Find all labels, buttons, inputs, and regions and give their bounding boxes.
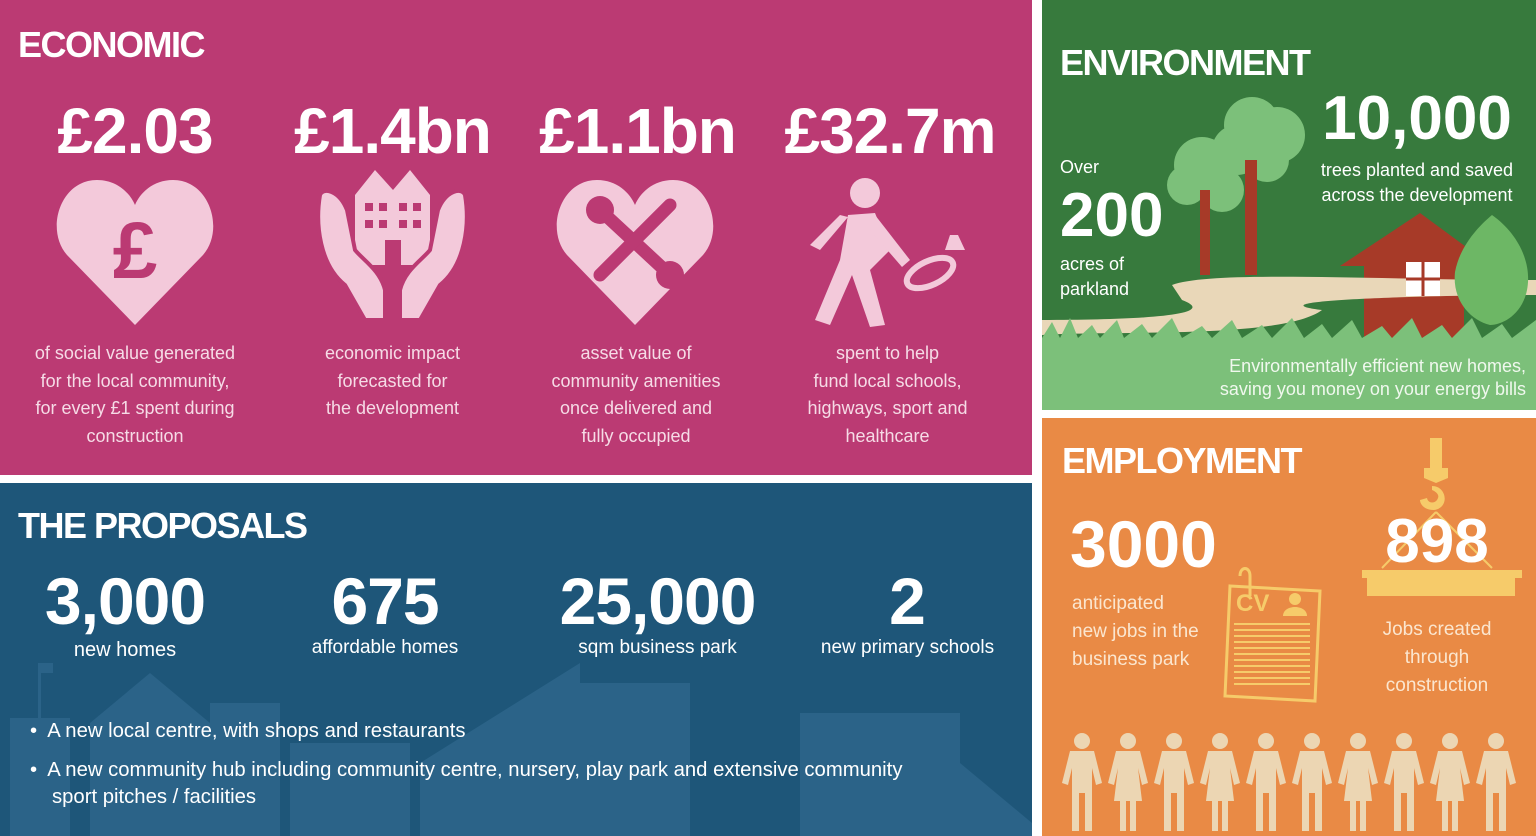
- text: social value: of social value generated: [35, 343, 235, 363]
- text: social value: for every £1 spent during: [35, 398, 235, 418]
- icon: heart with pound: [56, 180, 214, 325]
- stat: 675 affordable homes: [312, 564, 458, 658]
- text: social value: [35, 343, 235, 446]
- text: jobs through construction: Jobs created through construction: [1383, 619, 1491, 696]
- stat: over 200 acres: Over: [1060, 157, 1099, 177]
- text: efficient homes: saving you money on your energy bills: [1220, 379, 1526, 399]
- text: spent to help: [807, 343, 968, 446]
- illustration: park scene: [1042, 97, 1536, 410]
- text: efficient homes: [1220, 356, 1526, 399]
- stat: £1.1bn: £1.1bn: [539, 95, 736, 167]
- icon: hands with building: [320, 170, 465, 318]
- stat: £32.7m: £32.7m: [784, 95, 996, 167]
- text: spent to help: highways, sport and: [807, 398, 968, 418]
- text: economic impact: the development: [326, 398, 459, 418]
- stat: £2.03: £2.03: [57, 95, 213, 167]
- stat: 2 schools: [821, 564, 994, 658]
- stat: 2 schools: 2: [889, 564, 926, 638]
- bullet list: [30, 720, 902, 808]
- text: spent to help: spent to help: [836, 343, 939, 363]
- text: anticipated jobs: anticipated: [1072, 593, 1164, 614]
- panel: environment: [1042, 0, 1536, 410]
- stat: 675 affordable homes: 675: [331, 564, 439, 638]
- text: asset value: fully occupied: [581, 426, 691, 446]
- text: economic impact: [325, 343, 460, 418]
- icon: crane hook and beam: [1362, 438, 1522, 596]
- icon: heart with tools: [556, 180, 714, 325]
- text: social value: for the local community,: [41, 370, 229, 390]
- stat: 10,000 trees: 10,000: [1322, 84, 1512, 153]
- stat: over 200 acres: 200: [1060, 181, 1163, 250]
- stat: over 200 acres: acres of: [1060, 254, 1124, 274]
- stat: 2 schools: new primary schools: [821, 637, 994, 658]
- stat: 3000 jobs: 3000: [1070, 507, 1217, 581]
- icon row: people: [1062, 733, 1516, 831]
- panel: the proposals: [0, 483, 1032, 836]
- stat: over 200 acres: [1060, 157, 1163, 299]
- heading: economic: ECONOMIC: [18, 24, 204, 65]
- text: asset value: asset value of: [580, 343, 692, 363]
- icon: CV document: CV: [1236, 590, 1269, 617]
- bullet list: • A new local centre, with shops and restaurants: [30, 720, 466, 742]
- text: anticipated jobs: [1072, 593, 1199, 670]
- icon: CV document: [1224, 567, 1322, 703]
- stat: 675 affordable homes: affordable homes: [312, 637, 458, 658]
- text: anticipated jobs: business park: [1072, 649, 1189, 670]
- bullet list: sport pitches / facilities: [52, 786, 256, 808]
- panel: economic: [0, 0, 1032, 475]
- text: efficient homes: Environmentally efficient new homes,: [1229, 356, 1526, 376]
- heading: environment: ENVIRONMENT: [1060, 42, 1310, 83]
- stat: over 200 acres: parkland: [1060, 279, 1129, 299]
- bullet list: • A new community hub including community centre, nursery, play park and extensive community: [30, 759, 902, 781]
- stat: 10,000 trees: [1321, 84, 1513, 205]
- stat: £1.4bn: £1.4bn: [294, 95, 491, 167]
- text: asset value: once delivered and: [560, 398, 712, 418]
- panel: employment: [1042, 418, 1536, 836]
- stat: 10,000 trees: trees planted and saved across the development: [1321, 160, 1513, 205]
- stat: 898 jobs: 898: [1385, 507, 1489, 576]
- text: spent to help: fund local schools,: [813, 370, 962, 390]
- text: asset value: community amenities: [551, 370, 721, 390]
- stat: 3,000 new homes: 3,000: [45, 564, 205, 638]
- icon: heart with pound: £: [113, 206, 157, 295]
- text: economic impact: forecasted for: [337, 370, 448, 390]
- heading: the proposals: THE PROPOSALS: [18, 505, 307, 546]
- text: social value: construction: [86, 426, 184, 446]
- icon: badminton player: [810, 178, 965, 327]
- background: buildings silhouette: [10, 663, 1032, 836]
- stat: 25,000 sqm: sqm business park: [578, 637, 737, 658]
- stat: 25,000 sqm: 25,000: [560, 564, 755, 638]
- text: economic impact: economic impact: [325, 343, 460, 363]
- heading: employment: EMPLOYMENT: [1062, 440, 1301, 481]
- text: asset value: [551, 343, 721, 446]
- stat: 3,000 new homes: new homes: [74, 639, 176, 661]
- text: anticipated jobs: new jobs in the: [1072, 621, 1199, 642]
- text: spent to help: healthcare: [845, 426, 930, 446]
